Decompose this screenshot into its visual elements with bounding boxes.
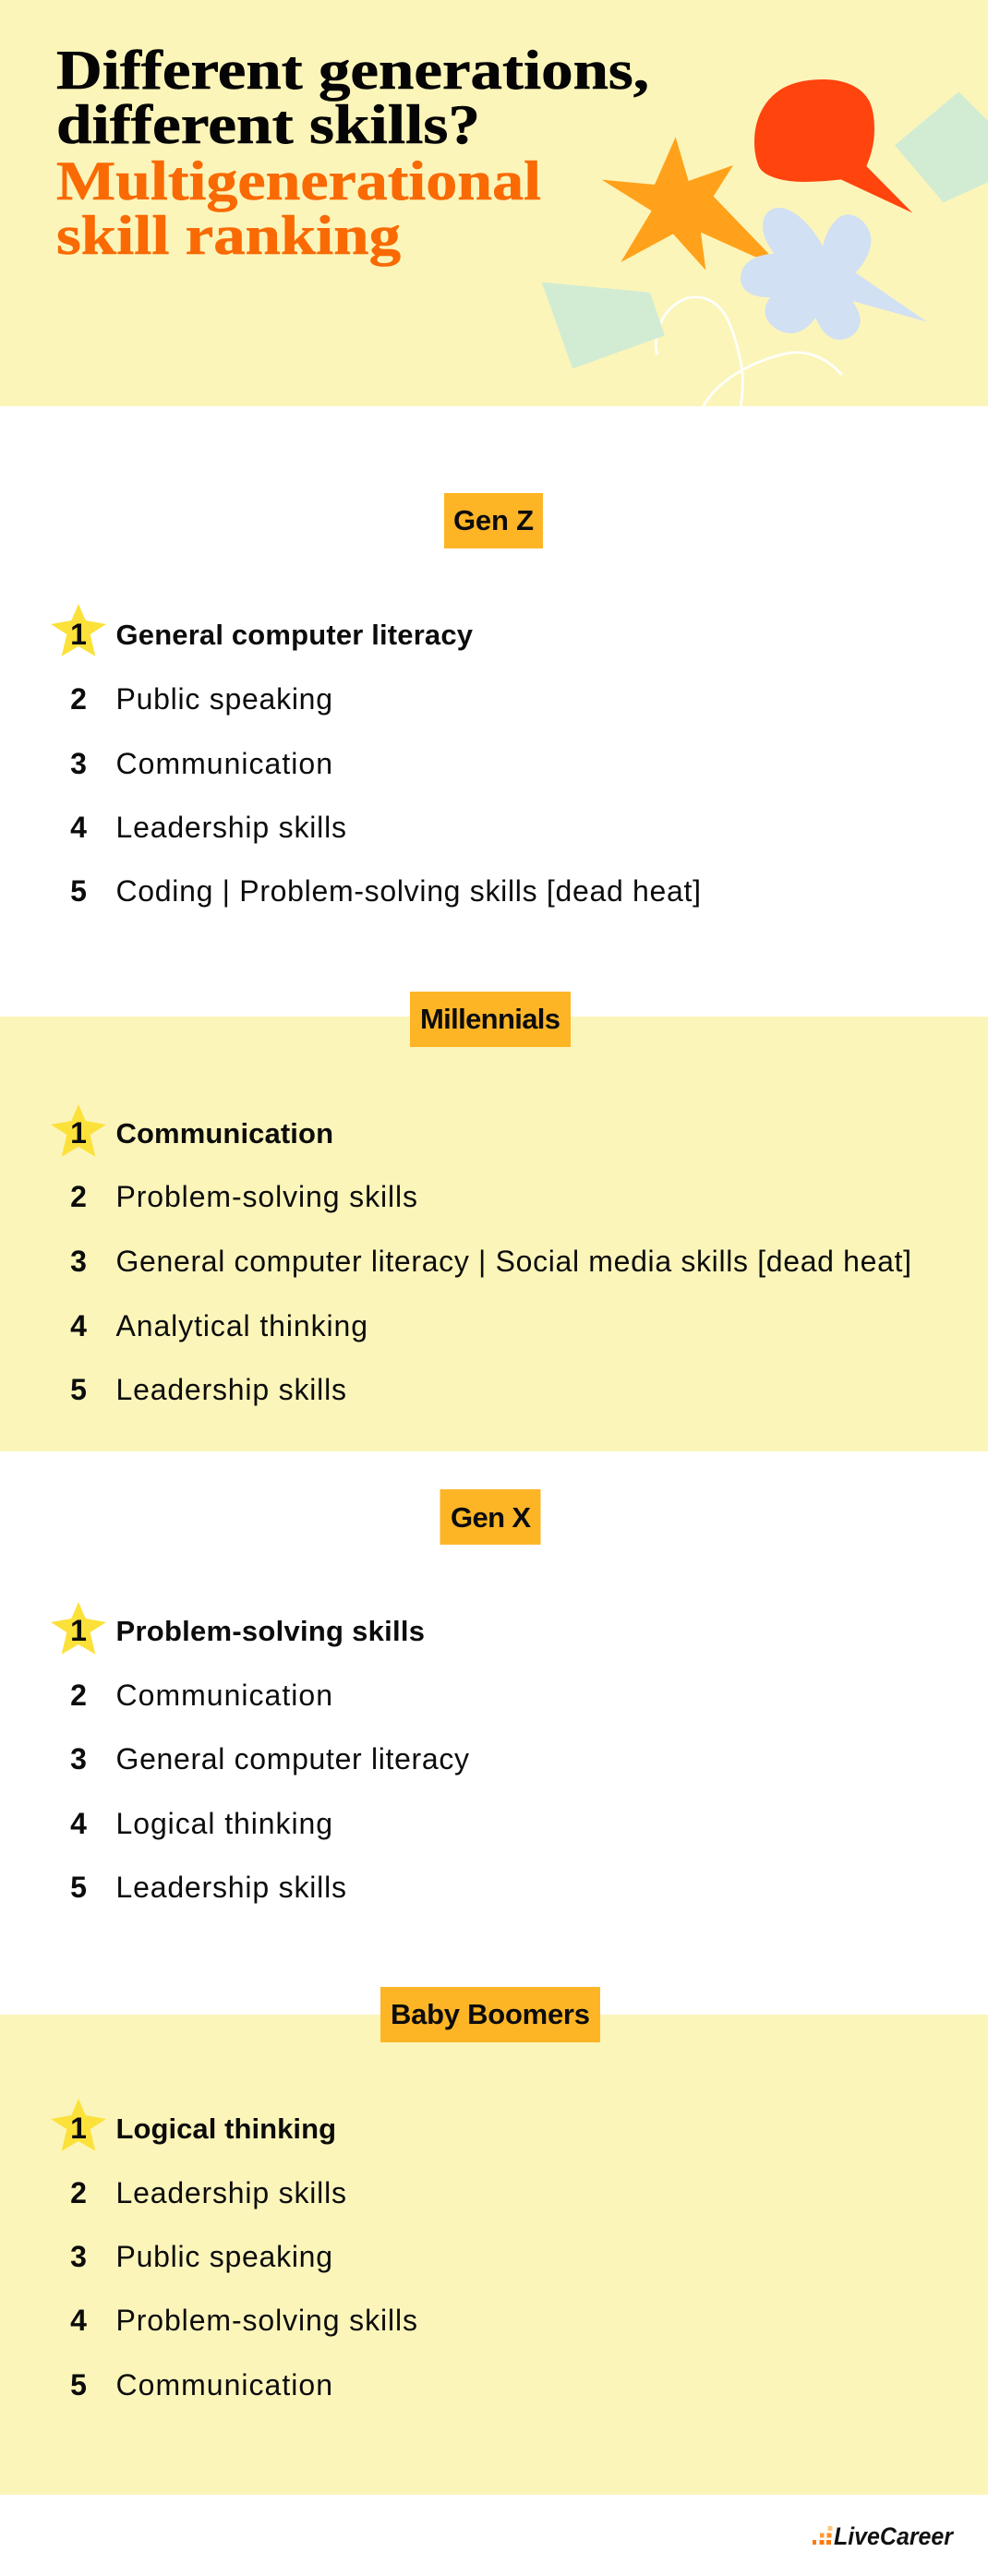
ranking list: Communication xyxy=(116,747,332,780)
ranking list: General computer literacy xyxy=(116,1742,469,1776)
star: rank 1 xyxy=(51,1602,106,1655)
panel: Gen Z xyxy=(51,493,701,908)
badge: Gen X xyxy=(440,1489,541,1545)
star: rank 1 xyxy=(51,604,106,656)
ranking list: 5 xyxy=(70,1871,87,1904)
ranking list: Logical thinking xyxy=(116,2113,336,2145)
badge: Baby Boomers: Baby Boomers xyxy=(391,1998,590,2030)
badge: Millennials: Millennials xyxy=(420,1003,560,1035)
ranking list: Communication xyxy=(116,1117,333,1150)
blue flower bubble xyxy=(741,208,927,340)
ranking list: Public speaking xyxy=(116,682,332,716)
ranking list: 5 xyxy=(70,2368,87,2401)
panel: Baby Boomers xyxy=(0,1987,988,2495)
logo: LiveCareer: LiveCareer xyxy=(834,2522,954,2550)
ranking list xyxy=(70,1116,911,1406)
ranking list: Leadership skills xyxy=(116,1871,346,1904)
white curved lines xyxy=(656,297,842,406)
ranking list: 1 xyxy=(70,1116,87,1150)
ranking list: 4 xyxy=(70,2304,87,2337)
title: Different generations, xyxy=(56,40,649,101)
ranking list: 5 xyxy=(70,1373,87,1406)
ranking list: 3 xyxy=(70,1742,87,1776)
ranking list xyxy=(70,1614,469,1904)
title: different skills? xyxy=(56,94,480,155)
title: Multigenerational xyxy=(56,150,541,211)
ranking list: 2 xyxy=(70,2176,87,2209)
panel: Gen X xyxy=(51,1489,541,1904)
panel: Millennials xyxy=(0,992,988,1451)
ranking list: Communication xyxy=(116,2368,332,2401)
title xyxy=(56,40,649,266)
star: rank 1 xyxy=(51,2099,106,2151)
ranking list: 4 xyxy=(70,1309,87,1342)
ranking list: 1 xyxy=(70,618,87,651)
ranking list xyxy=(70,2112,417,2401)
ranking list: Leadership skills xyxy=(116,811,346,844)
ranking list: Problem-solving skills xyxy=(116,1180,417,1213)
ranking list: Logical thinking xyxy=(116,1807,332,1840)
red speech bubble xyxy=(754,79,912,213)
badge: Gen X: Gen X xyxy=(451,1501,531,1534)
ranking list: 3 xyxy=(70,2240,87,2273)
ranking list xyxy=(70,618,701,908)
ranking list: 2 xyxy=(70,682,87,716)
ranking list: Leadership skills xyxy=(116,2176,346,2209)
ranking list: General computer literacy xyxy=(116,619,474,651)
ranking list: 3 xyxy=(70,747,87,780)
ranking list: 1 xyxy=(70,2112,87,2145)
mint shape right xyxy=(895,91,988,202)
ranking list: Problem-solving skills xyxy=(116,1615,425,1647)
ranking list: Communication xyxy=(116,1679,332,1712)
ranking list: 4 xyxy=(70,811,87,844)
ranking list: General computer literacy | Social media skills [dead heat] xyxy=(116,1245,911,1278)
badge: Gen Z xyxy=(444,493,543,548)
title: skill ranking xyxy=(56,205,401,266)
badge: Gen Z: Gen Z xyxy=(453,504,534,536)
badge: Millennials xyxy=(410,992,571,1047)
panel: header xyxy=(0,0,988,406)
ranking list: 2 xyxy=(70,1180,87,1213)
badge: Baby Boomers xyxy=(380,1987,600,2042)
mint shape left xyxy=(542,283,665,368)
star: rank 1 xyxy=(51,1104,106,1157)
illustration: abstract shapes xyxy=(542,79,988,406)
ranking list: 2 xyxy=(70,1679,87,1712)
ranking list: 3 xyxy=(70,1245,87,1278)
ranking list: 1 xyxy=(70,1614,87,1647)
ranking list: Public speaking xyxy=(116,2240,332,2273)
ranking list: Leadership skills xyxy=(116,1373,346,1406)
ranking list: Coding | Problem-solving skills [dead heat] xyxy=(116,874,701,908)
ranking list: Analytical thinking xyxy=(116,1309,367,1342)
orange star shape xyxy=(602,137,769,271)
ranking list: Problem-solving skills xyxy=(116,2304,417,2337)
ranking list: 4 xyxy=(70,1807,87,1840)
ranking list: 5 xyxy=(70,874,87,908)
